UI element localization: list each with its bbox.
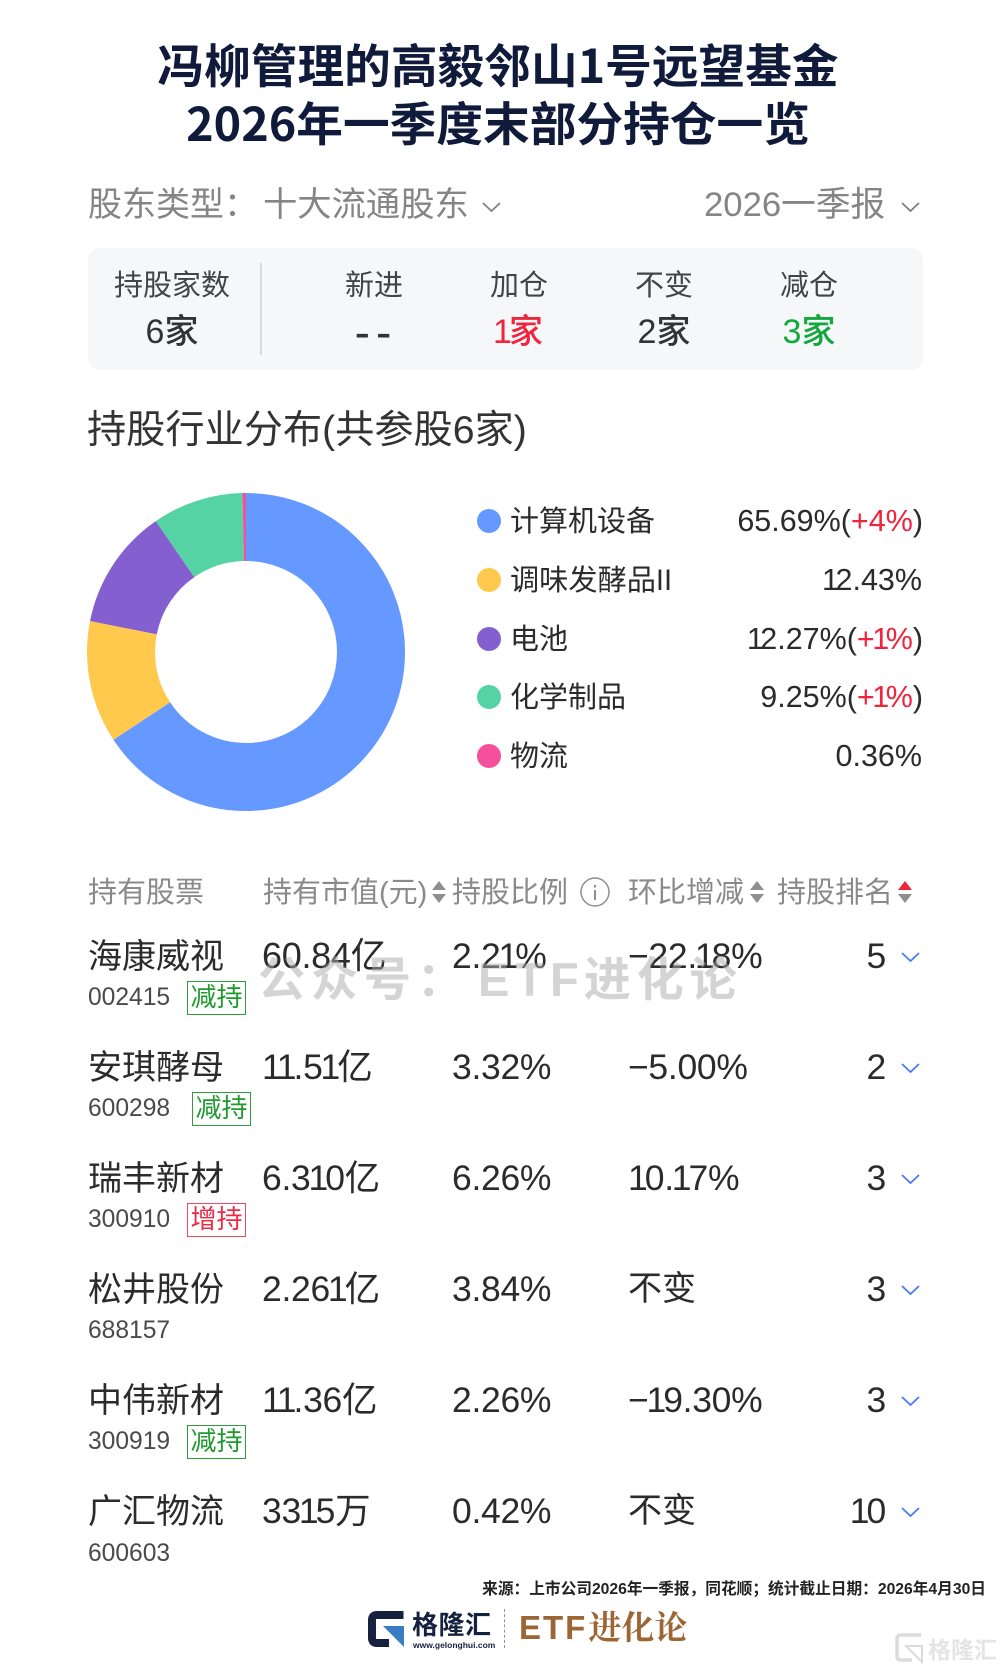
text: 减持 xyxy=(190,1426,242,1456)
filter: shareholder type: 股东类型： xyxy=(88,186,258,224)
legend row: computer equipment xyxy=(510,504,923,538)
row: Zhongwei xyxy=(88,1380,886,1459)
text: 10.17% xyxy=(628,1158,739,1198)
legend dot: battery xyxy=(477,627,501,651)
text: −5.00% xyxy=(628,1046,748,1086)
text: 11.51亿 xyxy=(262,1046,372,1086)
text: 减持 xyxy=(190,982,242,1012)
text: 新进 xyxy=(345,270,403,302)
text: 12.43% xyxy=(822,563,922,597)
row: Angel Yeast xyxy=(88,1046,886,1126)
text: 减仓 xyxy=(780,270,838,302)
title: 冯柳管理的高毅邻山1号远望基金 xyxy=(157,30,839,97)
text: 9.25%(+1%) xyxy=(760,680,923,714)
text: 1家 xyxy=(493,313,543,351)
text: 0.42% xyxy=(452,1490,551,1530)
text: 增持 xyxy=(190,1204,242,1234)
text: 安琪酵母 xyxy=(88,1049,224,1087)
text: 化学制品 xyxy=(510,682,626,714)
panel: holdings summary xyxy=(88,248,922,370)
text: -- xyxy=(355,306,397,358)
text: 3 xyxy=(867,1158,886,1198)
title: 2026年一季度末部分持仓一览 xyxy=(186,88,810,155)
text: 十大流通股东 xyxy=(263,186,469,224)
summary: holdings count xyxy=(114,270,230,351)
summary: unchanged xyxy=(635,270,693,351)
source note: 来源：上市公司2026年一季报，同花顺；统计截止日期：2026年4月30日 xyxy=(482,1581,986,1598)
corner watermark xyxy=(895,1631,997,1665)
filter: shareholder type xyxy=(88,186,469,224)
legend row: battery xyxy=(510,622,923,656)
text: 不变 xyxy=(635,270,693,302)
text: 3.32% xyxy=(452,1046,551,1086)
logo icon xyxy=(368,1611,404,1647)
text: 12.27%(+1%) xyxy=(747,622,923,656)
text: 持有市值(元) xyxy=(263,877,427,909)
text: 松井股份 xyxy=(88,1271,224,1309)
text: 600603 xyxy=(88,1540,170,1567)
text: 加仓 xyxy=(490,270,548,302)
logo divider xyxy=(504,1609,505,1648)
summary: new xyxy=(345,270,403,358)
legend row: chemical products xyxy=(510,680,923,714)
text: 6家 xyxy=(146,313,198,351)
text: 环比增减 xyxy=(628,877,744,909)
text: 65.69%(+4%) xyxy=(737,504,923,538)
text: 瑞丰新材 xyxy=(88,1160,224,1198)
text: 3家 xyxy=(783,313,835,351)
summary: decreased xyxy=(780,270,838,351)
text: 调味发酵品II xyxy=(510,564,672,596)
text: 2.26% xyxy=(452,1380,551,1420)
text: 2 xyxy=(867,1047,886,1087)
text: 中伟新材 xyxy=(88,1382,224,1420)
text: 3315万 xyxy=(262,1490,370,1530)
text: 10 xyxy=(850,1490,886,1530)
text: −19.30% xyxy=(628,1380,762,1420)
title xyxy=(157,30,839,155)
row: Ruifeng xyxy=(88,1158,886,1237)
divider xyxy=(260,263,262,355)
text: 688157 xyxy=(88,1317,170,1344)
text: 广汇物流 xyxy=(88,1493,224,1531)
text: 600298 xyxy=(88,1095,170,1122)
text: 持股排名 xyxy=(777,877,893,909)
text: 减持 xyxy=(195,1093,248,1123)
text: 3 xyxy=(867,1380,886,1420)
legend dot: chemical products xyxy=(477,685,501,709)
text: −22.18% xyxy=(628,936,762,976)
text: 2.21% xyxy=(452,936,546,976)
text: 5 xyxy=(867,936,886,976)
text: 002415 xyxy=(88,984,170,1011)
row: Hikvision xyxy=(88,935,886,1015)
text: 2家 xyxy=(638,313,690,351)
text: 60.84亿 xyxy=(262,935,386,976)
corner wordmark: 格隆汇 xyxy=(928,1631,997,1665)
row: Guanghui Logistics xyxy=(88,1490,886,1567)
text: 6.310亿 xyxy=(262,1158,380,1198)
text: 3 xyxy=(867,1268,886,1308)
logo: ETF evolution: ETF进化论 xyxy=(519,1602,687,1649)
legend dot: computer equipment xyxy=(477,509,501,533)
logo: Gelonghui xyxy=(368,1605,495,1650)
text: 2.261亿 xyxy=(262,1268,380,1308)
legend dot: seasoning xyxy=(477,568,501,592)
text: 物流 xyxy=(510,740,568,772)
summary: increased xyxy=(490,270,548,351)
legend row: logistics xyxy=(510,739,922,773)
legend xyxy=(477,504,923,773)
text: 0.36% xyxy=(836,739,922,773)
legend dot: logistics xyxy=(477,744,501,768)
text: 300919 xyxy=(88,1428,170,1455)
text: 计算机设备 xyxy=(510,506,655,538)
text: 3.84% xyxy=(452,1268,551,1308)
text: 海康威视 xyxy=(88,938,224,976)
text: 不变 xyxy=(628,1492,696,1530)
text: 持有股票 xyxy=(88,877,204,909)
corner logo icon xyxy=(895,1633,923,1664)
table header xyxy=(88,877,893,909)
watermark: 公众号：ETF进化论 xyxy=(258,953,743,1006)
logo url: www.gelonghui.com xyxy=(413,1640,495,1650)
text: 持股家数 xyxy=(114,270,230,302)
text: 6.26% xyxy=(452,1158,551,1198)
text: 11.36亿 xyxy=(262,1380,377,1420)
heading: industry distribution: 持股行业分布(共参股6家) xyxy=(87,409,527,452)
text: 300910 xyxy=(88,1206,170,1233)
text: 不变 xyxy=(628,1270,696,1308)
logo wordmark: 格隆汇 xyxy=(412,1605,492,1642)
text: 电池 xyxy=(510,624,568,656)
row: Matsui xyxy=(88,1268,886,1344)
filter: report period: 2026一季报 xyxy=(704,186,885,224)
legend row: seasoning xyxy=(510,563,922,597)
text: 持股比例 xyxy=(452,877,568,909)
